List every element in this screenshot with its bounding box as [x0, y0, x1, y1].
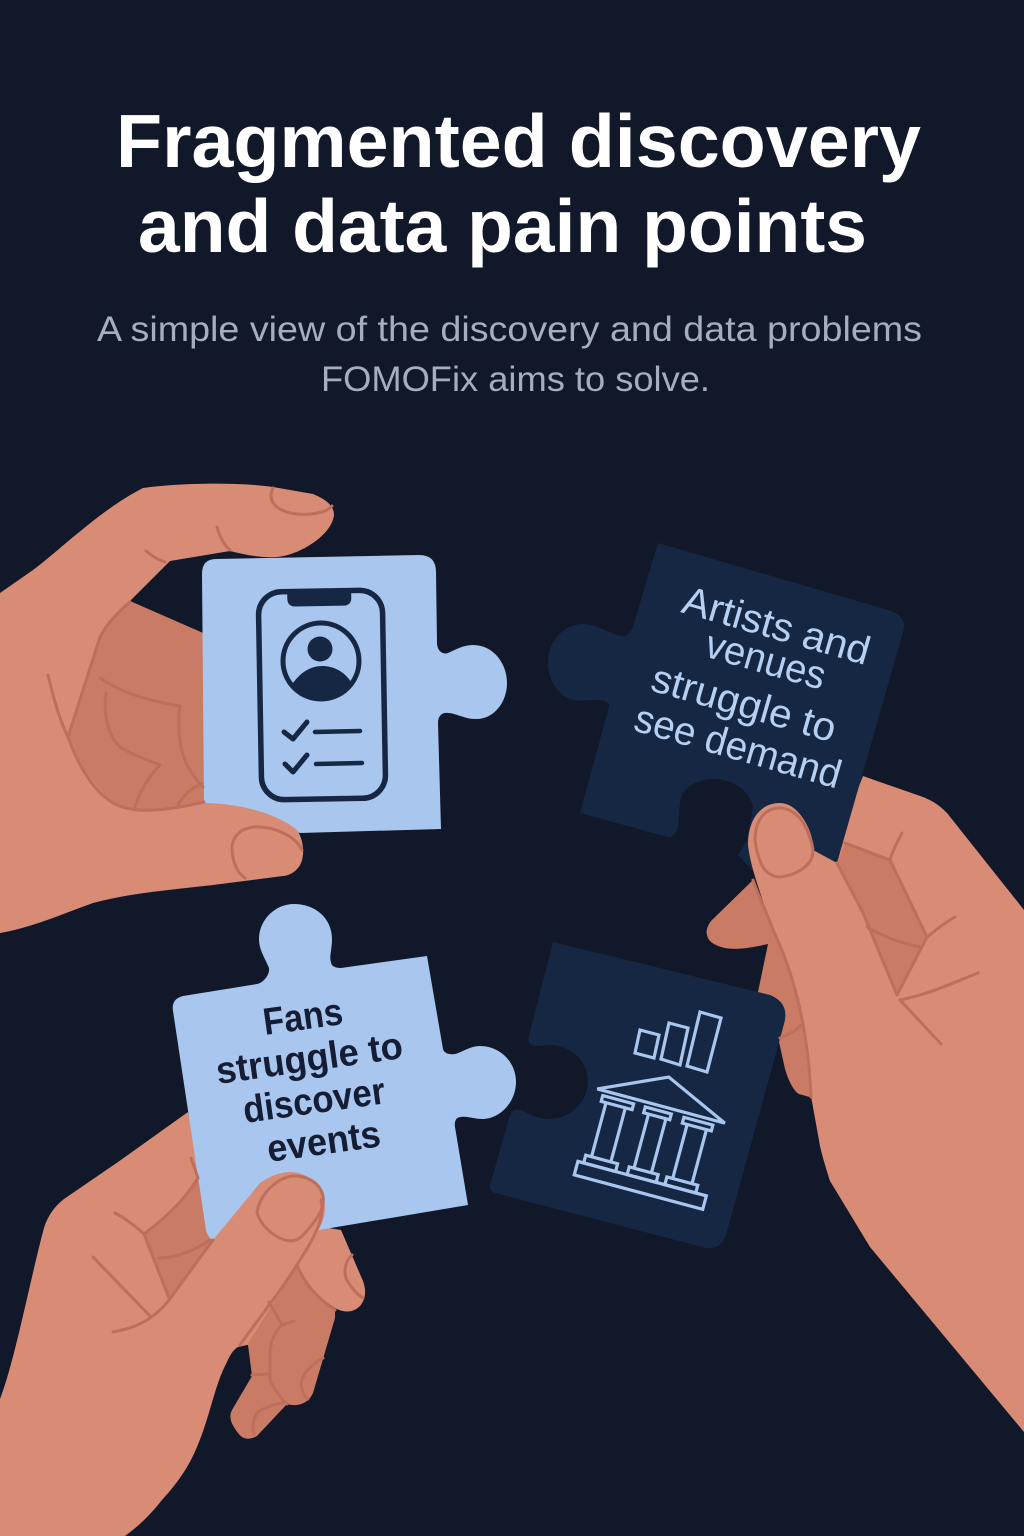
piece label	[213, 991, 405, 1171]
piece label: struggle to	[647, 656, 841, 751]
piece label: venues	[701, 622, 831, 699]
piece label: discover	[240, 1070, 388, 1132]
puzzle piece: phone profile	[202, 555, 507, 833]
back of hand	[790, 776, 1024, 1432]
back of hand	[0, 1112, 319, 1536]
shaded palm	[58, 601, 210, 818]
hand creases and nails	[48, 488, 332, 878]
subtitle: FOMOFix aims to solve.	[321, 360, 710, 399]
icon: smartphone with profile and checklist	[258, 590, 386, 800]
subtitle	[97, 310, 922, 399]
back finger	[297, 1225, 365, 1312]
thumb	[172, 1172, 325, 1345]
piece label: Artists and	[678, 578, 875, 674]
piece label	[630, 578, 875, 797]
hand: bottom left holding fans piece	[0, 904, 516, 1536]
title	[116, 99, 921, 268]
puzzle piece: artists and venues text	[548, 543, 904, 900]
hand: right side holding data pieces	[490, 543, 1024, 1432]
shaded palm	[837, 843, 927, 995]
hand creases and nail	[753, 808, 978, 1097]
title: and data pain points	[138, 184, 867, 268]
shaded fingers	[707, 880, 813, 1098]
title: Fragmented discovery	[116, 99, 921, 183]
hand creases and nails	[93, 1158, 363, 1434]
puzzle piece: venue and data icon	[490, 942, 785, 1248]
icon: columned building	[574, 1060, 734, 1209]
hand: top left holding phone piece	[0, 484, 507, 933]
piece label: see demand	[630, 696, 846, 797]
shaded palm	[144, 1178, 215, 1298]
shaded fingers	[230, 1265, 335, 1439]
thumb	[748, 803, 900, 1097]
piece label: events	[264, 1113, 383, 1171]
fingers and thumb	[0, 484, 334, 933]
piece label: Fans	[260, 991, 345, 1044]
piece label: struggle to	[213, 1025, 405, 1093]
icon: bar chart	[635, 1012, 721, 1072]
puzzle piece: fans text	[173, 904, 516, 1240]
subtitle: A simple view of the discovery and data problems	[97, 310, 922, 349]
